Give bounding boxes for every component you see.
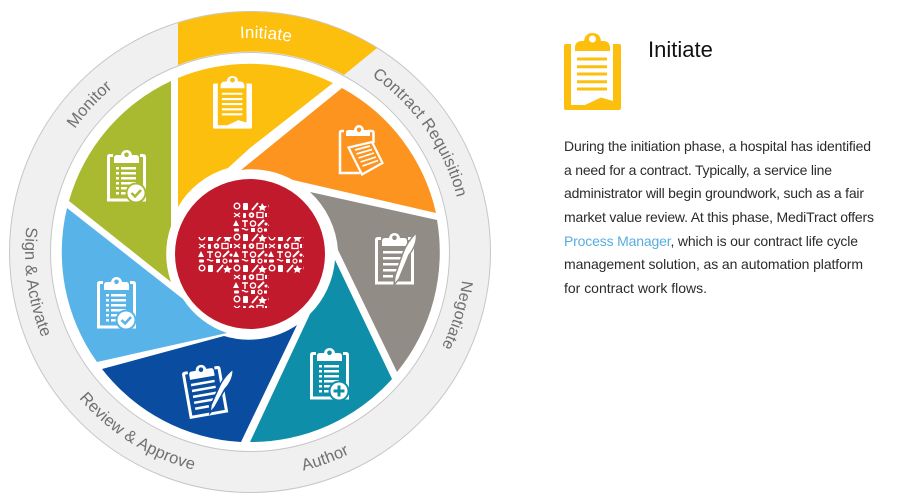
icon: author clipboard with plus xyxy=(312,348,350,402)
description text: a need for a contract. Typically, a service line xyxy=(564,162,832,178)
description text: for contract work flows. xyxy=(564,280,707,296)
petal: negotiate xyxy=(310,192,440,372)
petal: sign and activate xyxy=(62,208,227,362)
petal: contract requisition xyxy=(241,88,436,213)
label: Sign & Activate: Sign & Activate xyxy=(22,228,49,336)
panel icon: initiate clipboard xyxy=(564,33,621,110)
description text xyxy=(564,138,874,296)
description text: Process Manager, which is our contract life cycle xyxy=(564,233,858,249)
description text: market value review. At this phase, MediTract offers xyxy=(564,209,874,225)
outer ring xyxy=(30,32,470,472)
petal: monitor xyxy=(69,81,171,282)
icon: negotiate clipboard with pen xyxy=(376,233,416,285)
label: Initiate: Initiate xyxy=(241,26,292,42)
ring segment: Initiate xyxy=(178,12,377,75)
heading: Initiate xyxy=(648,37,713,62)
description text: administrator will begin groundwork, such as a fair xyxy=(564,185,864,201)
petal: review and approve xyxy=(102,325,297,442)
label: Negotiate: Negotiate xyxy=(443,282,473,349)
icon: sign and activate clipboard with check xyxy=(98,277,136,330)
icon: initiate clipboard xyxy=(213,76,252,129)
label: Contract Requisition: Contract Requisition xyxy=(374,69,465,196)
center medical cross xyxy=(175,179,325,329)
icon: review clipboard with pen xyxy=(182,362,233,417)
petal: author xyxy=(250,260,392,442)
icon: monitor clipboard with check xyxy=(108,150,146,204)
icon: contract requisition clipboard xyxy=(340,125,382,174)
description text: During the initiation phase, a hospital has identified xyxy=(564,138,871,154)
petal: initiate xyxy=(178,64,333,207)
label: Monitor: Monitor xyxy=(66,81,110,128)
description text: management solution, as an automation platform xyxy=(564,256,863,272)
label: Author: Author xyxy=(303,446,347,471)
label: Review & Approve: Review & Approve xyxy=(80,392,194,469)
